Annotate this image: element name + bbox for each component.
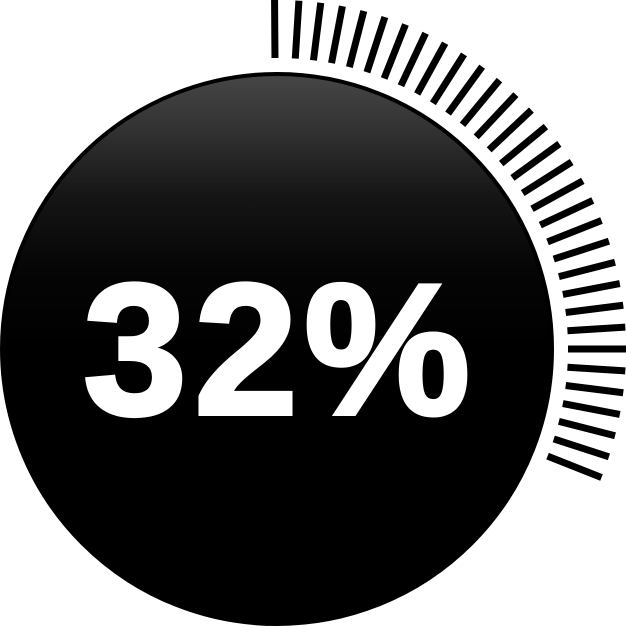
percentage value: 32% — [83, 245, 470, 454]
black dial circle — [2, 74, 552, 624]
radial tick scale — [271, 0, 626, 481]
